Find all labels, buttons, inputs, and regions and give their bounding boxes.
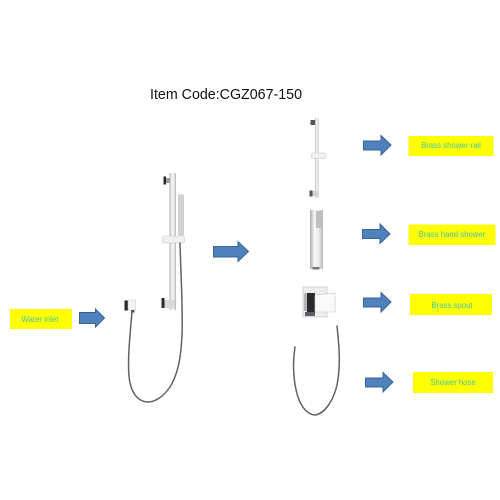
clamp [162,236,184,243]
rail [170,173,176,310]
label: Brass spout: Brass spout [431,301,473,310]
wall elbow [124,300,136,312]
top bracket [164,176,170,184]
title: Item Code:CGZ067-150 [150,87,302,103]
label: Water inlet: Water inlet [22,315,59,324]
label: Brass shower rail: Brass shower rail [421,141,481,150]
arrow: hose [366,372,393,392]
label: Brass hand shower: Brass hand shower [419,230,486,239]
arrow: hand shower [362,224,390,244]
label: Shower hose: Shower hose [430,378,476,387]
part: hand shower [310,210,323,270]
label: Shower hose [413,372,493,393]
label: Brass spout [410,294,492,315]
part: shower hose [294,326,339,415]
arrow: central [214,242,248,262]
part: shower rail [310,118,326,198]
assembled shower set [124,173,184,402]
lower bracket [162,298,174,308]
arrow: shower rail [364,136,391,155]
label: Brass hand shower [408,224,496,245]
label: Water inlet [10,309,72,329]
part: spout [303,287,335,317]
hand shower [178,194,184,236]
hose [129,243,182,402]
arrow: spout [364,292,391,312]
arrow: water inlet [80,309,104,327]
label: Brass shower rail [408,136,494,156]
